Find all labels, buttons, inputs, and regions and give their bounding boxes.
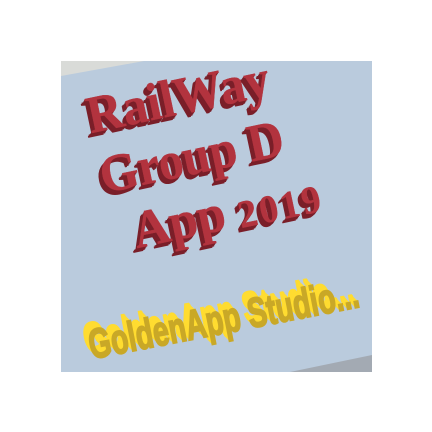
panel: blue background (61, 61, 372, 372)
title line: App 2019: App 2019 (127, 177, 327, 260)
studio name: GoldenApp Studio...: GoldenApp Studio... (84, 269, 363, 368)
title line: Group D: Group D (94, 109, 289, 205)
title line: RailWay: RailWay (81, 50, 275, 145)
